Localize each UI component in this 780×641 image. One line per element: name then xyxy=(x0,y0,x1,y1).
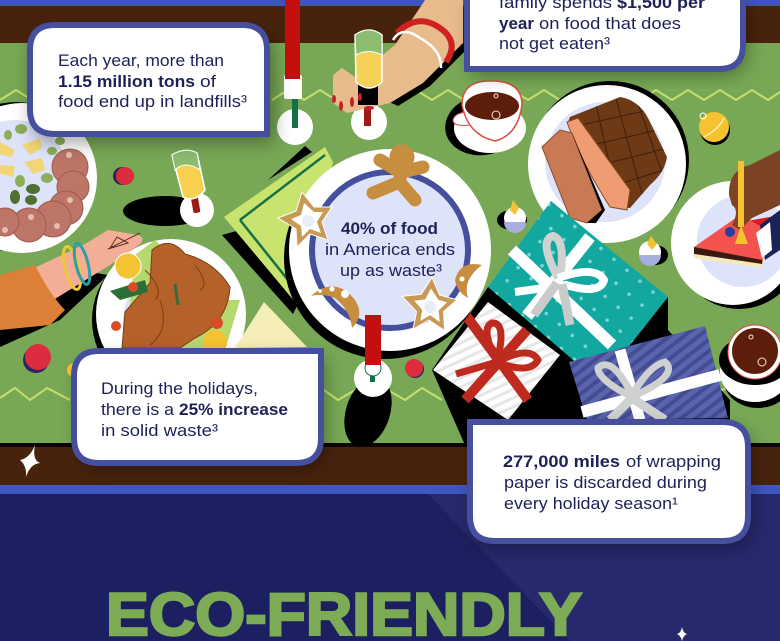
callout: solid waste: 25% increase xyxy=(179,400,288,419)
center stat text xyxy=(325,219,455,280)
callout: family spending xyxy=(467,0,747,75)
plate: cold cuts and cheese xyxy=(0,102,97,253)
callout: solid waste: in solid waste³ xyxy=(101,421,218,440)
sparkle: bottom left xyxy=(20,445,40,477)
champagne glass: left xyxy=(123,150,214,227)
ribbon xyxy=(512,236,612,345)
center stat text: in America ends xyxy=(325,240,455,259)
callout: wrapping paper xyxy=(470,422,752,547)
red bauble: center xyxy=(405,359,424,378)
zigzag table runner lines xyxy=(0,90,780,405)
moon cookie: left xyxy=(311,286,359,328)
center stat text: up as waste³ xyxy=(340,261,442,280)
star cookie: bottom xyxy=(395,271,461,338)
white ribbon xyxy=(582,350,720,420)
dark hand with fork xyxy=(729,150,780,244)
plate: sliced roast xyxy=(528,81,689,243)
callout: family spending: on food that does xyxy=(539,14,681,33)
tea lights xyxy=(497,200,668,266)
red ribbon xyxy=(456,310,538,400)
gingerbread man xyxy=(373,151,423,200)
callout: landfills: Each year, more than xyxy=(58,51,224,70)
center plate xyxy=(278,149,491,359)
coffee cup: right xyxy=(719,325,780,408)
callout: landfills: food end up in landfills³ xyxy=(58,92,247,111)
callout: family spending: year xyxy=(499,14,534,33)
callout: landfills: of xyxy=(200,72,216,91)
callout: wrapping paper: every holiday season¹ xyxy=(504,494,678,513)
callout: family spending: not get eaten³ xyxy=(499,34,610,53)
callout: solid waste xyxy=(74,351,325,469)
gift: white striped xyxy=(433,302,560,420)
callout: landfills xyxy=(30,25,274,143)
plate: roast turkey xyxy=(92,239,307,395)
arm and hand: left xyxy=(0,230,143,347)
ornament: red bauble xyxy=(113,167,134,185)
gift: blue striped xyxy=(569,326,728,420)
ornament: yellow bauble xyxy=(699,112,730,145)
coffee cup: top xyxy=(440,81,526,161)
callout: wrapping paper: of wrapping xyxy=(626,452,721,471)
plate: cake slice xyxy=(671,181,780,309)
gift: teal polka dot xyxy=(488,201,668,383)
moon cookie: right xyxy=(455,264,482,298)
callout: solid waste: there is a xyxy=(101,400,175,419)
top hand with glass xyxy=(332,0,470,140)
callout: landfills: 1.15 million tons xyxy=(58,72,195,91)
bottom candle xyxy=(336,315,400,453)
ornament: red and yellow baubles xyxy=(23,344,81,377)
callout: wrapping paper: paper is discarded during xyxy=(504,473,707,492)
black cast shadow under gifts xyxy=(432,280,730,445)
sparkle: title right xyxy=(677,627,687,641)
callout: wrapping paper: 277,000 miles xyxy=(503,452,620,471)
callout: solid waste: During the holidays, xyxy=(101,379,258,398)
star cookie: left xyxy=(278,192,332,247)
center stat text: 40% of food xyxy=(341,219,438,238)
napkin xyxy=(222,146,333,314)
top candle xyxy=(277,0,313,145)
